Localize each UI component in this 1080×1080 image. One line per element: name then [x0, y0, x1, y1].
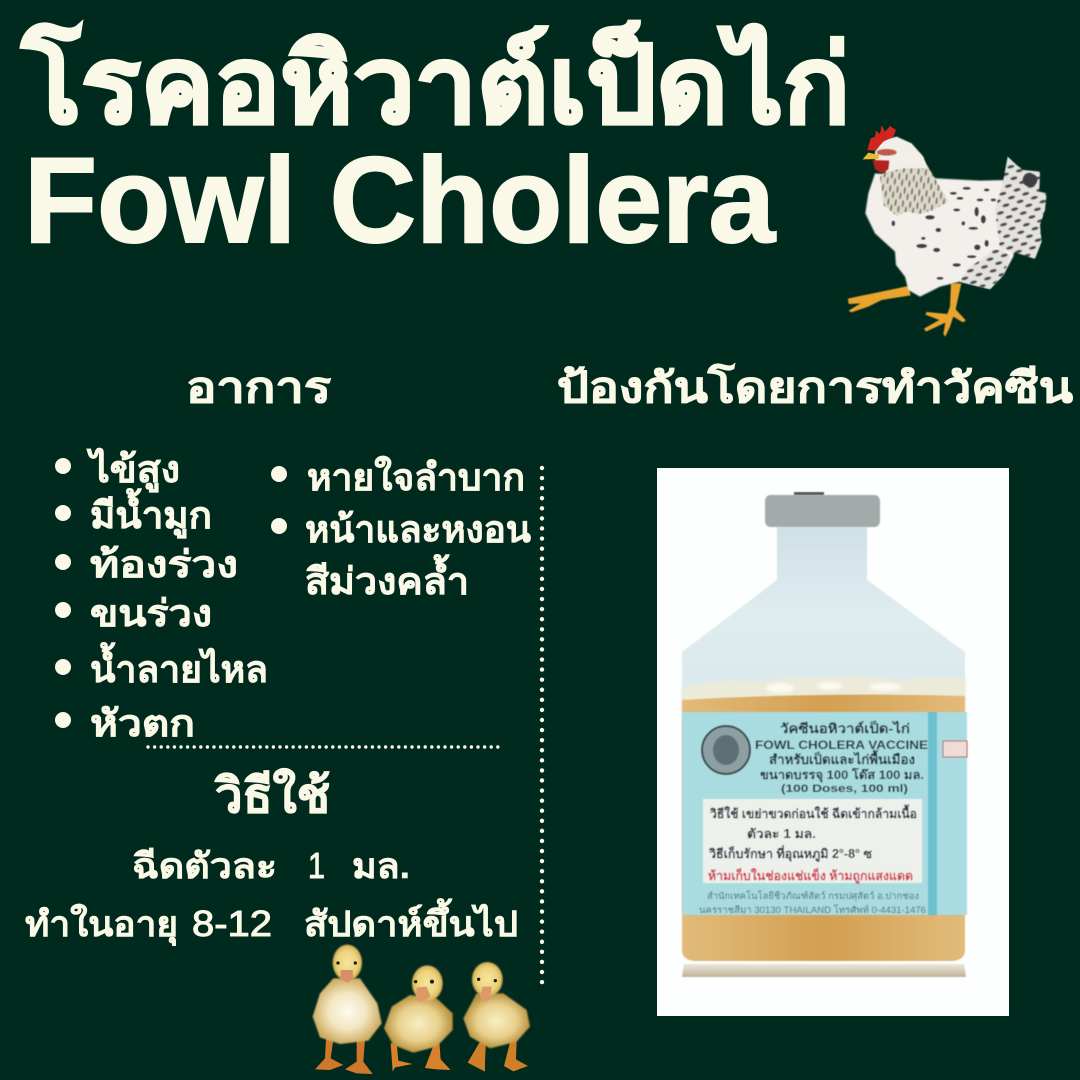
chicken tail [995, 157, 1047, 259]
vaccine foam [682, 676, 965, 712]
label heading text: วัคซีนอหิวาต์เป็ด-ไก่ [780, 719, 910, 736]
chicken speckles [892, 173, 1037, 280]
heading: symptoms: อาการ [186, 364, 332, 411]
photo: ducklings [313, 945, 530, 1074]
usage: age: 8-12 [192, 903, 272, 944]
bottle label: นครราชสีมา 30130 THAILAND โทรศัพท์ 0-4431-1476 [699, 904, 926, 916]
bottle label: (100 Doses, 100 ml) [781, 783, 908, 795]
usage: age [25, 898, 518, 946]
symptoms list: left column [55, 447, 268, 744]
bottle label: วิธีเก็บรักษา ที่อุณหภูมิ 2°-8° ซ [708, 845, 873, 862]
usage: dose: ฉีดตัวละ [132, 847, 277, 886]
symptoms list: left column: น้ำลายไหล [90, 642, 268, 690]
symptoms list: left column: ไข้สูง [86, 447, 180, 493]
symptoms list: left column: หัวตก [90, 703, 195, 744]
bottle cap [765, 495, 880, 527]
bottle label [682, 712, 967, 916]
symptoms list: left column: ท้องร่วง [90, 544, 238, 585]
chicken wattle [873, 160, 889, 173]
usage: dose: มล. [352, 847, 410, 886]
title: Thai: โรคอหิวาต์เป็ดไก่ [21, 20, 850, 145]
symptoms list: left column: มีน้ำมูก [90, 488, 212, 539]
usage: age: ทำในอายุ [25, 903, 178, 946]
label instruction box [703, 799, 922, 883]
symptoms list: right column: หน้าและหงอน [305, 509, 531, 550]
bottle label: ตัวละ 1 มล. [747, 827, 816, 841]
duckling 2 [384, 965, 453, 1072]
bottle label: ขนาดบรรจุ 100 โด๊ส 100 มล. [760, 767, 924, 783]
label footer text: สำนักเทคโนโลยีชีวภัณฑ์สัตว์ กรมปศุสัตว์ อ.ปากช่อง [707, 890, 919, 902]
label seal [702, 726, 750, 774]
symptoms list: right column: หายใจลำบาก [307, 455, 525, 498]
bottle label: ห้ามเก็บในช่องแช่แข็ง ห้ามถูกแสงแดด [708, 868, 913, 884]
heading: how to use: วิธีใช้ [214, 767, 330, 823]
chicken body [865, 173, 1017, 297]
photo: vaccine bottle [657, 468, 1009, 1016]
symptoms list: right column [271, 455, 531, 602]
photo: chicken [848, 125, 1047, 337]
symptoms list: left column: ขนร่วง [90, 593, 212, 634]
heading: prevention by vaccination: ป้องกันโดยการทำวัคซีน [557, 363, 1073, 411]
bottle label: วิธีใช้ เขย่าขวดก่อนใช้ ฉีดเข้ากล้ามเนื้อ [709, 804, 917, 821]
chicken neck hackle [880, 153, 948, 216]
bottle label: สำหรับเป็ดและไก่พื้นเมือง [769, 749, 915, 767]
usage: age: สัปดาห์ขึ้นไป [304, 898, 518, 944]
bottle base [682, 964, 966, 977]
usage: dose: 1 [308, 845, 325, 886]
chicken comb [867, 125, 896, 151]
chicken head [875, 137, 927, 172]
title: English: Fowl Cholera [24, 132, 776, 268]
chicken back plumage [960, 250, 1010, 289]
symptoms list: right column: สีม่วงคล้ำ [305, 554, 469, 602]
duckling 1 [313, 945, 382, 1074]
bottle glass [682, 527, 965, 700]
duckling 3 [463, 962, 530, 1072]
chicken beak [863, 153, 879, 159]
chicken legs [848, 283, 966, 337]
usage: dose [132, 845, 410, 886]
bottle label: FOWL CHOLERA VACCINE [755, 740, 928, 752]
vaccine liquid [682, 695, 965, 961]
white photo panel [657, 468, 1009, 1016]
